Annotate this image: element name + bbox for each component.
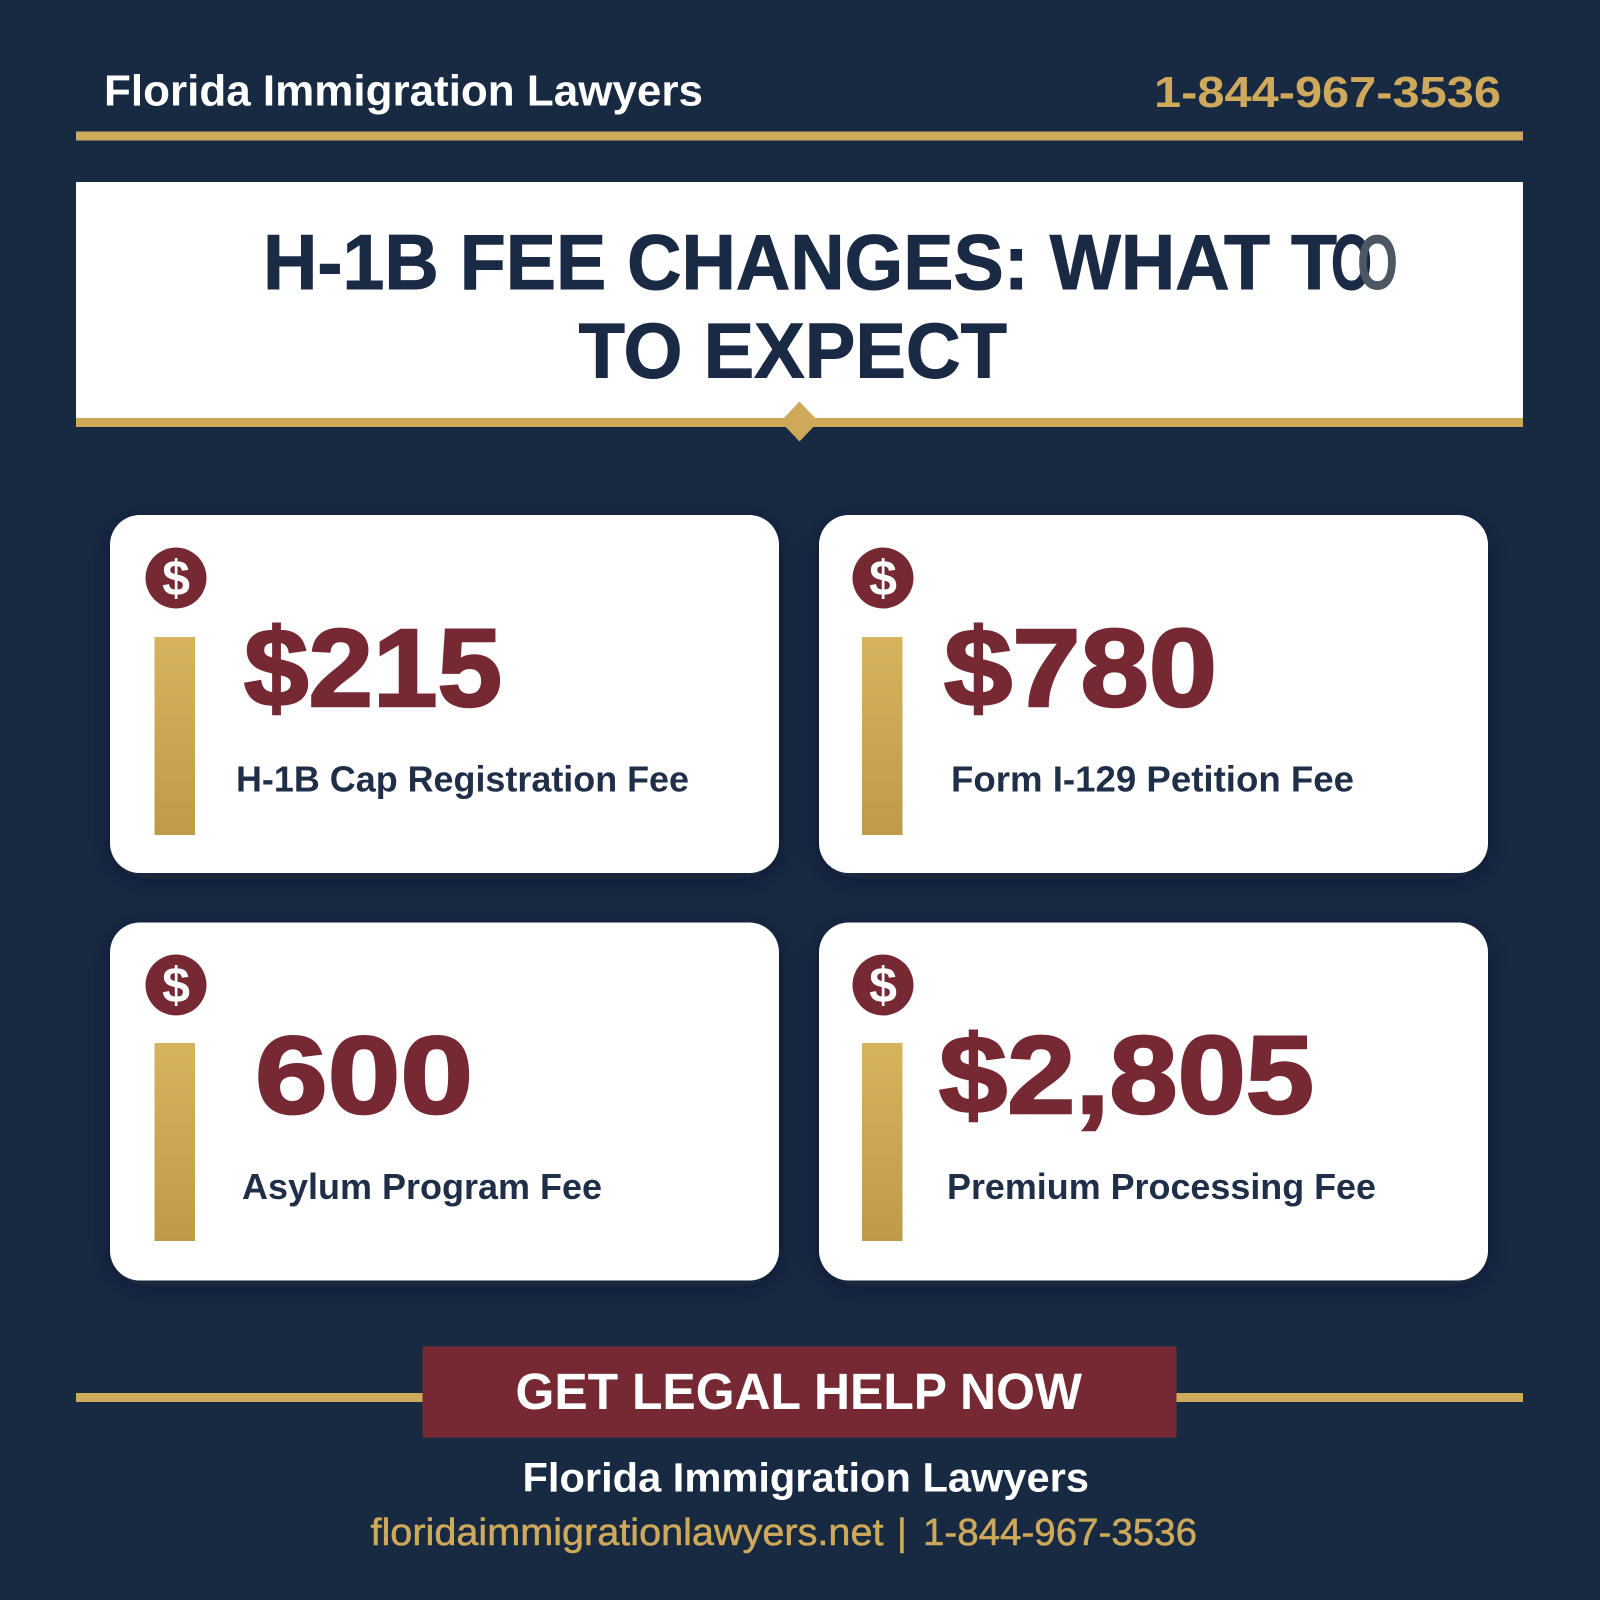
fee amount: $2,805 [939, 1014, 1314, 1137]
icon: dollar coin: $ [869, 958, 897, 1014]
fee amount: $215 [244, 607, 502, 730]
fee amount: $780 [944, 607, 1217, 730]
gold bar [154, 1043, 195, 1241]
gold bar [862, 1043, 902, 1241]
title gold rule [76, 418, 1523, 427]
header [76, 66, 1523, 140]
icon: dollar coin: $ [869, 550, 897, 606]
footer website and phone: floridaimmigrationlawyers.net [370, 1512, 884, 1554]
call to action banner [76, 1346, 1523, 1438]
title heading: O [1331, 218, 1372, 306]
card: premium processing fee [819, 922, 1488, 1280]
header phone number: 1-844-967-3536 [1154, 68, 1501, 117]
footer website and phone: | [897, 1512, 907, 1554]
gold bar [154, 637, 195, 835]
icon: dollar coin [146, 548, 206, 608]
title heading: H-1B FEE CHANGES: WHAT T [263, 218, 1337, 306]
footer firm name: Florida Immigration Lawyers [522, 1454, 1089, 1500]
icon: dollar coin [852, 954, 914, 1016]
footer contact [370, 1454, 1197, 1554]
card: Form I-129 petition fee [819, 515, 1488, 873]
icon: dollar coin: $ [162, 958, 190, 1014]
icon: dollar coin [852, 548, 914, 608]
fee label: Form I-129 Petition Fee [951, 758, 1354, 800]
icon: dollar coin: $ [162, 550, 190, 606]
fee label: Asylum Program Fee [242, 1166, 602, 1207]
fee amount: 600 [255, 1014, 473, 1137]
card: asylum program fee [110, 922, 779, 1280]
title heading: O [1357, 218, 1398, 306]
header gold rule [76, 132, 1523, 140]
title heading: TO EXPECT [579, 306, 1007, 394]
title panel [76, 182, 1523, 442]
fee label: H-1B Cap Registration Fee [236, 758, 689, 800]
card: H-1B cap registration fee [110, 515, 779, 873]
title heading [263, 218, 1398, 394]
call to action banner: GET LEGAL HELP NOW [516, 1363, 1083, 1420]
gold diamond [780, 402, 818, 442]
icon: dollar coin [146, 954, 206, 1016]
header firm name: Florida Immigration Lawyers [104, 66, 703, 116]
gold bar [862, 637, 902, 835]
fee label: Premium Processing Fee [947, 1166, 1376, 1207]
footer website and phone: 1-844-967-3536 [923, 1512, 1197, 1554]
